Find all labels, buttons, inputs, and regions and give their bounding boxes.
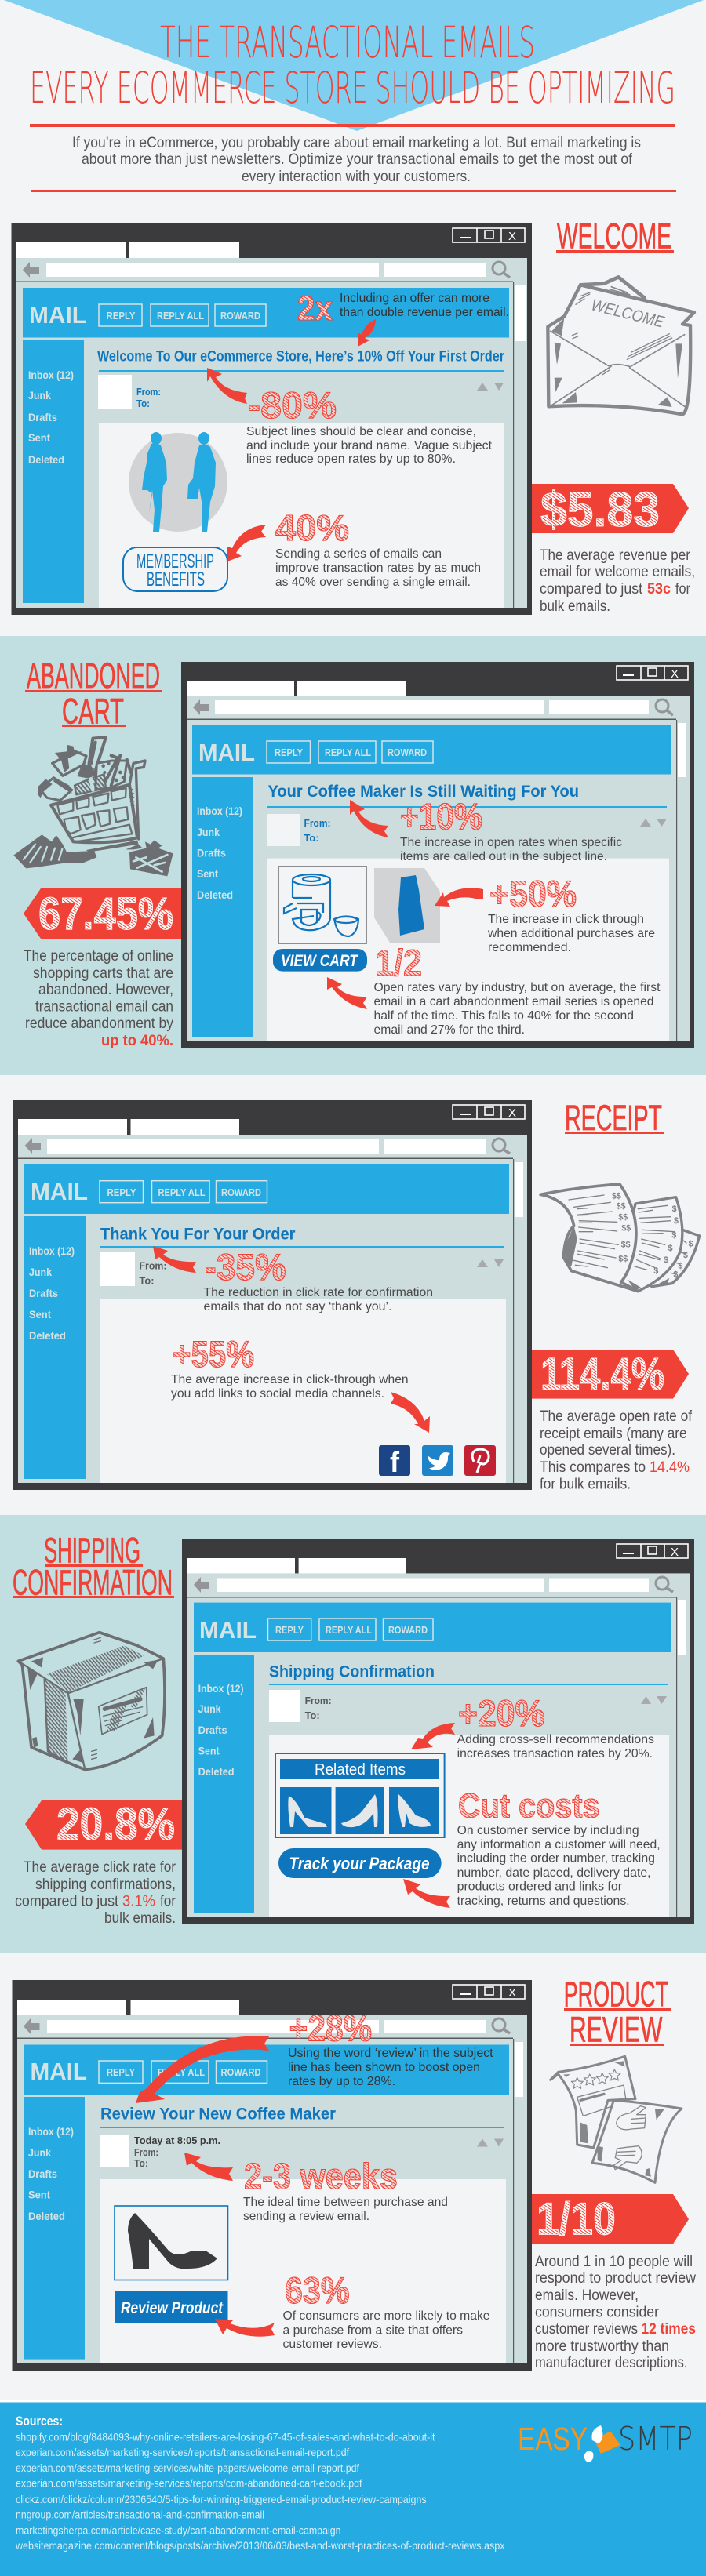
- mail header bar: REPLY: [275, 1624, 304, 1636]
- arrow: thank you subject: [153, 1246, 196, 1273]
- sidebar: Junk: [198, 1702, 221, 1715]
- shipping stat description: for: [160, 1894, 176, 1910]
- text: open rates: items are called out in the subject line.: [400, 850, 607, 863]
- browser tabs: [18, 1119, 239, 1135]
- text: open rates: [400, 836, 622, 863]
- arrow: subject stat: [350, 800, 388, 837]
- text: subject lines: and include your brand name. Vague subject: [246, 439, 493, 452]
- receipt stat description: 14.4%: [650, 1459, 690, 1476]
- content panel: [100, 2179, 506, 2363]
- abandoned cart stat description: [24, 948, 173, 1049]
- text: subject lines: Subject lines should be clear and concise,: [246, 425, 476, 438]
- stat: +10%: +10%: [400, 795, 482, 837]
- stat ribbon: 67.45%: 67.45%: [38, 888, 173, 939]
- sender block: From:: [134, 2146, 158, 2158]
- arrow: reviews to button: [215, 2319, 275, 2337]
- stat: +55%: +55%: [173, 1333, 254, 1375]
- window controls: X: [508, 230, 516, 243]
- title rule: [30, 124, 675, 127]
- browser toolbar: [194, 1577, 673, 1593]
- sources list: experian.com/assets/marketing-services/reports/com-abandoned-cart-ebook.pdf: [16, 2476, 362, 2489]
- icon: receipts: $: [653, 1266, 658, 1276]
- mail header bar: REPLY: [275, 747, 303, 758]
- sidebar: Inbox (12): [198, 1682, 244, 1695]
- stat: cut costs: Cut costs: [458, 1786, 600, 1826]
- text: ideal time: sending a review email.: [243, 2210, 369, 2223]
- text: ideal time: The ideal time between purchase and: [243, 2196, 448, 2209]
- track your package button: [278, 1848, 442, 1878]
- header envelope flap: [4, 0, 704, 131]
- icon: receipts: $: [671, 1230, 676, 1240]
- email subject: Shipping Confirmation: [269, 1662, 435, 1681]
- browser toolbar: [193, 699, 673, 715]
- mail header bar: [24, 1164, 509, 1214]
- icon: receipts: $: [664, 1255, 668, 1265]
- band: shipping confirmation: [0, 1515, 706, 1953]
- heading: product review: REVIEW: [570, 2010, 663, 2050]
- shipping stat description: shipping confirmations,: [35, 1877, 176, 1893]
- text: social links: The average increase in click-through when: [171, 1373, 409, 1386]
- text: customer service: including the order number, tracking: [457, 1852, 655, 1865]
- icon: receipts: $$: [618, 1254, 628, 1263]
- sender block: To:: [304, 832, 318, 844]
- mail header bar: [24, 2045, 509, 2095]
- heading: product review: [564, 1975, 671, 2050]
- window controls: [453, 1105, 525, 1120]
- mail header bar: MAIL: [198, 739, 255, 766]
- sidebar: Sent: [197, 867, 218, 880]
- text: series of emails: as 40% over sending a single email.: [275, 576, 471, 589]
- sources list: clickz.com/clickz/column/2306540/5-tips-for-winning-triggered-email-product-review-campaigns: [16, 2493, 427, 2505]
- offer stat: Including an offer can more: [340, 292, 489, 305]
- mail header bar: REPLY: [107, 1186, 136, 1198]
- icon: receipts: $: [678, 1261, 682, 1270]
- product: coffee bag: [374, 868, 440, 943]
- receipt stat description: opened several times).: [540, 1442, 675, 1459]
- text: click through: when additional purchases are: [487, 927, 655, 940]
- sidebar: Drafts: [197, 847, 226, 859]
- sidebar: [24, 1216, 86, 1479]
- sidebar: Sent: [29, 1308, 51, 1321]
- sender block: To:: [140, 1275, 154, 1286]
- text: customer reviews: a purchase from a site that offers: [282, 2324, 463, 2337]
- sender block: [100, 1252, 504, 1286]
- arrow: to track button: [403, 1879, 450, 1908]
- text: cart abandonment series: [373, 981, 661, 1037]
- welcome stat description: The average revenue per: [540, 547, 691, 564]
- icon: receipts: $$: [621, 1241, 631, 1250]
- icon: package box: [18, 1633, 165, 1770]
- track your package button: Track your Package: [289, 1854, 430, 1873]
- heading: abandoned cart: CART: [62, 692, 124, 731]
- review product button: Review Product: [121, 2299, 224, 2317]
- sender block: To:: [134, 2157, 148, 2169]
- window controls: X: [671, 1546, 679, 1559]
- abandoned cart stat description: up to 40%.: [101, 1033, 173, 1049]
- shipping stat description: The average click rate for: [24, 1859, 176, 1876]
- intro paragraph: [72, 135, 641, 185]
- heading: shipping confirmation: SHIPPING: [44, 1531, 140, 1570]
- product: coffee maker: [278, 867, 366, 943]
- mail header bar: MAIL: [29, 301, 86, 329]
- sender block: [100, 2135, 504, 2169]
- text: click through: The increase in click through: [488, 913, 644, 926]
- sidebar: Drafts: [29, 1287, 58, 1299]
- abandoned cart stat description: transactional email can: [35, 999, 173, 1015]
- text: review subject: line has been shown to boost open: [288, 2061, 480, 2074]
- icon: receipts: $: [668, 1244, 673, 1253]
- stat: -80%: -80%: [248, 384, 337, 426]
- icon: shopping cart with gifts: [13, 737, 173, 876]
- membership benefits button: BENEFITS: [147, 569, 205, 590]
- heading: abandoned cart: ABANDONED: [27, 656, 160, 696]
- window controls: [617, 1544, 688, 1559]
- illustration: two shoppers: [129, 432, 227, 532]
- sender block: From:: [304, 817, 331, 829]
- stat: -35%: -35%: [205, 1246, 286, 1288]
- browser toolbar: [25, 1138, 510, 1154]
- text: customer service: number, date placed, delivery date,: [457, 1866, 651, 1880]
- mail header bar: ROWARD: [388, 747, 427, 758]
- band: abandoned cart: [0, 636, 706, 1075]
- sidebar: Deleted: [197, 888, 233, 901]
- abandoned cart stat description: The percentage of online: [24, 948, 173, 965]
- window controls: [453, 1985, 525, 2000]
- mail header bar: REPLY ALL: [158, 1186, 206, 1198]
- mail header bar: ROWARD: [221, 1186, 261, 1198]
- product: shoe: [115, 2206, 227, 2280]
- mail header bar: ROWARD: [221, 2066, 260, 2078]
- sidebar: Deleted: [198, 1765, 235, 1778]
- shipping stat description: [15, 1859, 176, 1927]
- sidebar: Deleted: [29, 1329, 66, 1342]
- stat ribbon: 114.4%: 114.4%: [540, 1349, 664, 1400]
- stat: 1/2: 1/2: [375, 942, 422, 983]
- arrow: additional purchases: [435, 888, 483, 907]
- text: click through: [487, 913, 655, 954]
- mail header bar: MAIL: [31, 1178, 88, 1205]
- sender block: From:: [140, 1259, 166, 1272]
- text: subject lines: [246, 425, 493, 466]
- icon: review sheets: [551, 2056, 682, 2182]
- browser tabs: [187, 681, 406, 696]
- icon: receipts: [540, 1184, 700, 1292]
- text: customer reviews: [282, 2309, 490, 2351]
- welcome stat description: 53c: [647, 581, 671, 598]
- arrow: offer to subject: [358, 319, 376, 347]
- stat: 2-3 weeks: 2-3 weeks: [244, 2156, 398, 2196]
- text: customer service: any information a customer will need,: [457, 1838, 661, 1851]
- mail header bar: [194, 1603, 671, 1652]
- text: customer reviews: customer reviews.: [282, 2338, 382, 2351]
- sender block: From:: [305, 1695, 332, 1706]
- browser toolbar: [23, 262, 510, 278]
- sources heading: Sources:: [16, 2414, 63, 2429]
- mail header bar: ROWARD: [388, 1624, 428, 1636]
- email subject: Thank You For Your Order: [100, 1225, 295, 1244]
- icon: receipts: $: [673, 1270, 678, 1279]
- icon: receipts: $: [672, 1204, 677, 1214]
- arrow: open rates to button: [327, 977, 367, 1009]
- logo: easy smtp: EASY: [518, 2421, 588, 2457]
- browser tabs: [16, 242, 239, 258]
- related items block: Related Items: [315, 1761, 406, 1778]
- mail header bar: ROWARD: [220, 310, 260, 322]
- receipt stat description: for bulk emails.: [540, 1476, 631, 1493]
- arrow: review word: [136, 2036, 269, 2103]
- browser tabs: [17, 2000, 239, 2015]
- email subject: Your Coffee Maker Is Still Waiting For You: [268, 783, 579, 801]
- sidebar: Inbox (12): [28, 2125, 74, 2138]
- email subject: Review Your New Coffee Maker: [100, 2105, 336, 2124]
- intro paragraph: about more than just newsletters. Optimize your transactional emails to get the most out of: [82, 151, 633, 168]
- text: review subject: rates by up to 28%.: [288, 2075, 395, 2088]
- window controls: X: [671, 667, 679, 681]
- panel: receipt email window: [13, 1100, 532, 1490]
- stat: +28%: +28%: [289, 2007, 372, 2048]
- icon: facebook: [379, 1445, 410, 1478]
- sidebar: Inbox (12): [197, 805, 242, 817]
- abandoned cart stat description: shopping carts that are: [33, 965, 173, 982]
- sidebar: Drafts: [198, 1724, 227, 1736]
- sources list: [15, 2431, 505, 2552]
- sidebar: [23, 340, 84, 603]
- icon: receipts: $: [674, 1216, 679, 1226]
- stat: 63%: 63%: [285, 2269, 350, 2311]
- arrow: to social icons: [391, 1392, 430, 1433]
- icon: open envelope: WELCOME: [589, 296, 666, 332]
- browser toolbar: [24, 2018, 510, 2034]
- stat ribbon: 1/10: [532, 2194, 689, 2245]
- text: click through: recommended.: [488, 941, 571, 954]
- sidebar: Drafts: [28, 411, 57, 423]
- sources list: experian.com/assets/marketing-services/reports/transactional-email-report.pdf: [16, 2446, 349, 2458]
- sidebar: [194, 1655, 254, 1913]
- text: customer reviews: Of consumers are more likely to make: [282, 2309, 490, 2323]
- text: customer service: tracking, returns and questions.: [457, 1895, 630, 1908]
- text: cart abandonment series: Open rates vary by industry, but on average, the first: [373, 981, 661, 994]
- sources list: shopify.com/blog/8484093-why-online-retailers-are-losing-67-45-of-sales-and-what-to-do-about-it: [16, 2431, 435, 2443]
- panel: sources footer: [0, 2403, 706, 2576]
- sources list: websitemagazine.com/content/blogs/posts/archive/2013/06/03/best-and-worst-practices-of-product-reviews.aspx: [15, 2539, 505, 2552]
- product review stat description: respond to product review: [535, 2270, 696, 2287]
- shipping stat description: compared to just: [15, 1894, 119, 1910]
- sidebar: Sent: [28, 2189, 50, 2201]
- mail header bar: MAIL: [199, 1616, 257, 1644]
- panel: abandoned cart email window: [181, 662, 694, 1048]
- product review stat description: customer reviews: [535, 2321, 638, 2338]
- text: cart abandonment series: email and 27% for the third.: [373, 1023, 525, 1037]
- related items block: [275, 1753, 445, 1837]
- content panel: [269, 1735, 669, 1917]
- product review stat description: Around 1 in 10 people will: [535, 2254, 693, 2270]
- text: cross-sell: [457, 1733, 654, 1760]
- heading: shipping confirmation: [13, 1531, 174, 1603]
- logo: easy smtp: [518, 2420, 693, 2462]
- window controls: [453, 228, 525, 243]
- stat ribbon: 1/10: 1/10: [537, 2194, 616, 2245]
- window controls: X: [508, 1106, 516, 1120]
- text: social links: you add links to social media channels.: [171, 1387, 384, 1401]
- window controls: [617, 666, 688, 681]
- receipt stat description: The average open rate of: [540, 1408, 693, 1425]
- review product button: [115, 2291, 227, 2323]
- text: cross-sell: increases transaction rates by 20%.: [457, 1747, 653, 1760]
- icon: receipts: $: [689, 1239, 693, 1248]
- heading: shipping confirmation: CONFIRMATION: [13, 1563, 173, 1603]
- stat: +20%: +20%: [458, 1692, 545, 1734]
- sidebar: [24, 2097, 85, 2360]
- text: cart abandonment series: email in a cart abandonment email series is opened: [373, 995, 654, 1008]
- mail header bar: REPLY ALL: [326, 1624, 372, 1636]
- text: review subject: Using the word ‘review’ in the subject: [288, 2047, 493, 2060]
- mail header bar: REPLY ALL: [158, 2066, 205, 2078]
- stat: +50%: +50%: [489, 873, 577, 914]
- icon: pinterest: [464, 1445, 496, 1476]
- sources list: nngroup.com/articles/transactional-and-confirmation-email: [16, 2508, 264, 2520]
- sender block: [269, 1690, 667, 1722]
- membership benefits button: MEMBERSHIP: [136, 550, 214, 572]
- welcome stat description: [540, 547, 695, 615]
- offer stat: than double revenue per email.: [340, 306, 509, 319]
- icon: open envelope: [548, 277, 694, 414]
- mail header bar: REPLY ALL: [325, 747, 371, 758]
- sender block: Today at 8:05 p.m.: [134, 2135, 220, 2146]
- stat ribbon: $5.83: $5.83: [540, 483, 660, 537]
- icon: twitter: [422, 1445, 453, 1476]
- icon: receipts: $$: [621, 1223, 631, 1233]
- icon: facebook: f: [390, 1446, 400, 1478]
- sender block: [98, 375, 504, 409]
- sources list: experian.com/assets/marketing-services/white-papers/welcome-email-report.pdf: [16, 2462, 359, 2474]
- text: social links: [171, 1373, 409, 1401]
- footer strip: [0, 2400, 706, 2403]
- text: reduction in click rate: The reduction in click rate for confirmation: [204, 1286, 433, 1299]
- sidebar: Junk: [28, 2146, 51, 2159]
- sidebar: [192, 777, 253, 1037]
- arrow: series to button: [227, 525, 266, 561]
- welcome stat description: compared to just: [540, 581, 643, 598]
- panel: shipping email window: [182, 1539, 694, 1924]
- receipt stat description: This compares to: [540, 1459, 646, 1476]
- membership benefits button: [123, 547, 227, 591]
- arrow: timing: [184, 2153, 233, 2181]
- icon: receipts: $$: [618, 1212, 628, 1222]
- mail header bar: REPLY: [107, 310, 136, 322]
- intro paragraph: If you’re in eCommerce, you probably care about email marketing a lot. But email marketing is: [72, 135, 641, 151]
- text: series of emails: [275, 547, 481, 589]
- intro rule: [31, 190, 676, 192]
- content panel: [100, 1299, 506, 1483]
- sidebar: Junk: [29, 1266, 52, 1278]
- logo: easy smtp: SMTP: [618, 2420, 693, 2458]
- sidebar: Drafts: [28, 2167, 57, 2180]
- sender block: [267, 814, 667, 846]
- product review stat description: manufacturer descriptions.: [535, 2355, 687, 2371]
- content panel: [267, 859, 669, 1041]
- text: customer service: [457, 1824, 661, 1908]
- sources list: marketingsherpa.com/article/case-study/cart-abandonment-email-campaign: [16, 2523, 340, 2536]
- receipt stat description: [540, 1408, 693, 1493]
- text: ideal time: [243, 2196, 448, 2223]
- welcome stat description: for: [675, 581, 691, 598]
- panel: welcome email window: [11, 223, 532, 615]
- sidebar: Inbox (12): [28, 369, 74, 381]
- receipt stat description: receipt emails (many are: [540, 1426, 687, 1442]
- icon: receipts: $$: [612, 1191, 621, 1201]
- offer stat: [297, 289, 509, 328]
- mail header bar: REPLY: [107, 2066, 135, 2078]
- icon: receipts: $$: [617, 1202, 626, 1212]
- product review stat description: emails. However,: [535, 2287, 639, 2304]
- title: [30, 17, 675, 113]
- text: reduction in click rate: emails that do not say ‘thank you’.: [204, 1300, 392, 1313]
- text: cart abandonment series: half of the time. This falls to 40% for the second: [373, 1009, 634, 1023]
- shipping stat description: 3.1%: [122, 1894, 155, 1910]
- content panel: [99, 423, 504, 608]
- sidebar: Junk: [197, 826, 220, 838]
- product review stat description: [535, 2254, 696, 2371]
- sidebar: Deleted: [28, 2210, 65, 2222]
- text: cross-sell: Adding cross-sell recommendations: [457, 1733, 654, 1746]
- arrow: subject line stat: [207, 368, 247, 404]
- arrow: cross-sell: [411, 1723, 455, 1749]
- product review stat description: consumers consider: [535, 2305, 660, 2321]
- sender block: To:: [136, 398, 150, 409]
- window controls: X: [508, 1986, 516, 2000]
- sender block: To:: [305, 1709, 320, 1721]
- text: reduction in click rate: [204, 1286, 433, 1313]
- sidebar: Inbox (12): [29, 1244, 75, 1257]
- abandoned cart stat description: reduce abandonment by: [25, 1016, 173, 1032]
- stat: 40%: 40%: [275, 507, 349, 548]
- heading: abandoned cart: [25, 656, 162, 731]
- shipping stat description: bulk emails.: [104, 1910, 176, 1927]
- text: review subject: [288, 2047, 493, 2088]
- text: subject lines: lines reduce open rates by up to 80%.: [246, 452, 456, 466]
- welcome stat description: bulk emails.: [540, 598, 610, 615]
- mail header bar: REPLY ALL: [157, 310, 204, 322]
- product review stat description: 12 times: [642, 2321, 696, 2338]
- mail header bar: MAIL: [30, 2058, 87, 2085]
- mail header bar: [23, 288, 509, 337]
- text: series of emails: improve transaction rates by as much: [275, 561, 481, 575]
- abandoned cart stat description: abandoned. However,: [38, 982, 173, 998]
- text: customer service: On customer service by including: [457, 1824, 639, 1837]
- view cart button: VIEW CART: [281, 952, 359, 970]
- offer stat: 2x: [297, 289, 333, 328]
- sender block: From:: [136, 386, 161, 398]
- email subject: Welcome To Our eCommerce Store, Here’s 10% Off Your First Order: [97, 348, 505, 365]
- sidebar: Sent: [198, 1744, 220, 1757]
- sidebar: Junk: [28, 389, 51, 401]
- sidebar: Deleted: [28, 453, 64, 466]
- text: customer service: products ordered and links for: [457, 1880, 623, 1893]
- icon: receipts: $: [683, 1251, 688, 1260]
- intro paragraph: every interaction with your customers.: [242, 169, 471, 185]
- mail header bar: [192, 725, 671, 775]
- browser tabs: [187, 1558, 406, 1574]
- stat ribbon: 20.8%: 20.8%: [56, 1799, 175, 1850]
- panel: product review email window: [13, 1980, 532, 2371]
- text: open rates: The increase in open rates when specific: [400, 836, 622, 849]
- product review stat description: more trustworthy than: [535, 2338, 669, 2355]
- sidebar: Sent: [28, 431, 50, 444]
- text: series of emails: Sending a series of emails can: [275, 547, 442, 561]
